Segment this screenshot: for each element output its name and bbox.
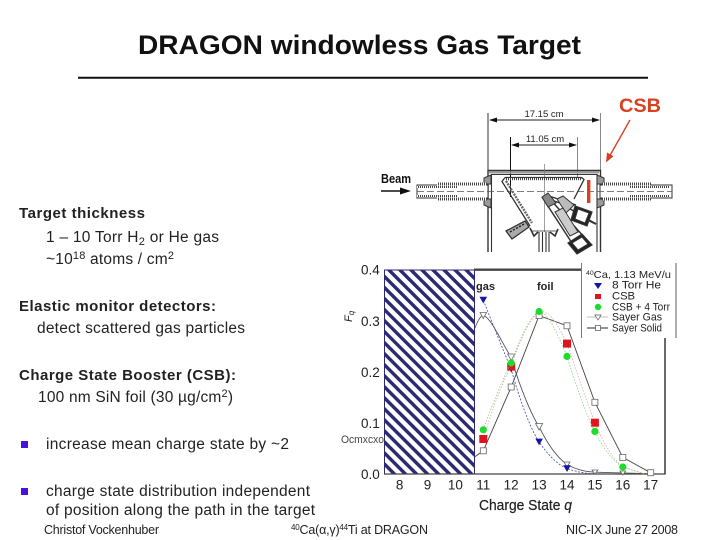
garbled axis label: Ocmxcxo — [341, 434, 384, 446]
legend: Sayer Gas — [612, 312, 662, 324]
text block: elastic monitor detectors: detect scattered gas particles — [37, 320, 245, 337]
x axis labels: 17 — [643, 478, 658, 492]
x axis labels — [396, 478, 658, 492]
footer: Christof Vockenhuber — [44, 523, 159, 537]
text block: charge state booster: 100 nm SiN foil (30 µg/cm — [38, 389, 221, 406]
curve: Sayer Gas — [475, 312, 653, 475]
dimension: 17.15 cm: 17.15 cm — [524, 109, 564, 120]
x axis labels: 16 — [615, 478, 630, 492]
legend — [581, 263, 676, 338]
text block: target thickness: 2 — [139, 236, 145, 248]
dimension: 17.15 cm — [488, 109, 600, 170]
chart: charge state distribution — [341, 262, 676, 514]
curve: CSB — [479, 311, 645, 474]
y axis labels: 0.1 — [361, 416, 380, 431]
text block: target thickness: atoms / cm — [86, 251, 168, 268]
curve: 8 Torr He — [480, 297, 595, 474]
y axis labels: 0.4 — [361, 262, 380, 278]
bullet: charge state distribution: of position along the path in the target — [46, 502, 316, 519]
legend: 8 Torr He — [612, 280, 661, 292]
text block: target thickness: or He gas — [145, 229, 219, 246]
x axis labels: 12 — [504, 478, 519, 492]
footer: 44 — [339, 523, 349, 532]
x axis labels: 9 — [424, 478, 431, 492]
dimension: 11.05 cm — [510, 134, 578, 197]
CSB callout with arrow: CSB — [619, 96, 661, 117]
text block: charge state booster: 2 — [222, 388, 228, 400]
y axis title: q — [347, 310, 356, 315]
x axis labels: 10 — [448, 478, 463, 492]
text block: target thickness: ~10 — [46, 251, 73, 268]
footer: Ti at DRAGON — [348, 523, 428, 537]
bullet: charge state distribution: charge state distribution independent — [46, 483, 311, 500]
y axis labels — [361, 262, 380, 482]
text block: target thickness: Target thickness — [19, 205, 145, 222]
y axis labels: 0.3 — [361, 314, 380, 329]
diagram: gas target chamber — [381, 109, 672, 254]
y axis title: F — [343, 315, 355, 322]
text block: target thickness — [19, 205, 219, 268]
bullet: mean charge state: increase mean charge state by ~2 — [46, 436, 289, 453]
text block: target thickness: 18 — [73, 250, 85, 262]
footer: NIC-IX June 27 2008 — [566, 523, 678, 537]
beam label and arrow — [381, 172, 411, 194]
x axis labels: 8 — [396, 478, 403, 492]
beam pipes — [417, 164, 672, 232]
footer — [44, 523, 678, 537]
legend: 40 — [586, 270, 594, 277]
legend: Ca, 1.13 MeV/u — [594, 269, 671, 281]
gas and foil labels: foil — [537, 281, 554, 293]
curve: Sayer Solid — [475, 313, 654, 476]
bullet: charge state distribution — [21, 483, 316, 519]
text block: elastic monitor detectors — [19, 298, 245, 337]
chamber walls — [484, 170, 604, 252]
inner gas cell and detectors — [502, 178, 596, 254]
text block: elastic monitor detectors: Elastic monitor detectors: — [19, 298, 216, 315]
legend: CSB — [612, 290, 635, 302]
beam label and arrow: Beam — [381, 172, 411, 186]
y axis labels: 0.2 — [361, 365, 380, 380]
chart frame — [384, 270, 666, 474]
text block: target thickness: 2 — [168, 250, 174, 262]
text block: charge state booster — [19, 367, 236, 406]
title: DRAGON windowless Gas Target — [138, 30, 581, 60]
x axis labels: 15 — [587, 478, 602, 492]
gas and foil labels: gas — [476, 281, 495, 293]
curve: CSB + 4 Torr — [480, 308, 645, 474]
excluded hatched region — [384, 270, 474, 474]
footer: 40 — [291, 523, 300, 532]
y axis labels: 0.0 — [361, 467, 380, 482]
dimension: 11.05 cm: 11.05 cm — [526, 134, 564, 145]
text block: target thickness: 1 – 10 Torr H — [46, 229, 138, 246]
legend: CSB + 4 Torr — [612, 302, 670, 314]
text block: charge state booster: Charge State Booster (CSB): — [19, 367, 236, 384]
CSB foil marker — [587, 180, 590, 203]
CSB callout with arrow — [606, 96, 661, 162]
footer: Ca(α,γ) — [300, 523, 340, 537]
x axis title: Charge State q — [479, 498, 572, 514]
x axis labels: 11 — [476, 478, 490, 492]
x axis labels: 13 — [532, 478, 547, 492]
x axis labels: 14 — [559, 478, 575, 492]
gas and foil labels — [476, 281, 554, 293]
text block: charge state booster: ) — [228, 389, 233, 406]
legend: Sayer Solid — [612, 322, 662, 334]
